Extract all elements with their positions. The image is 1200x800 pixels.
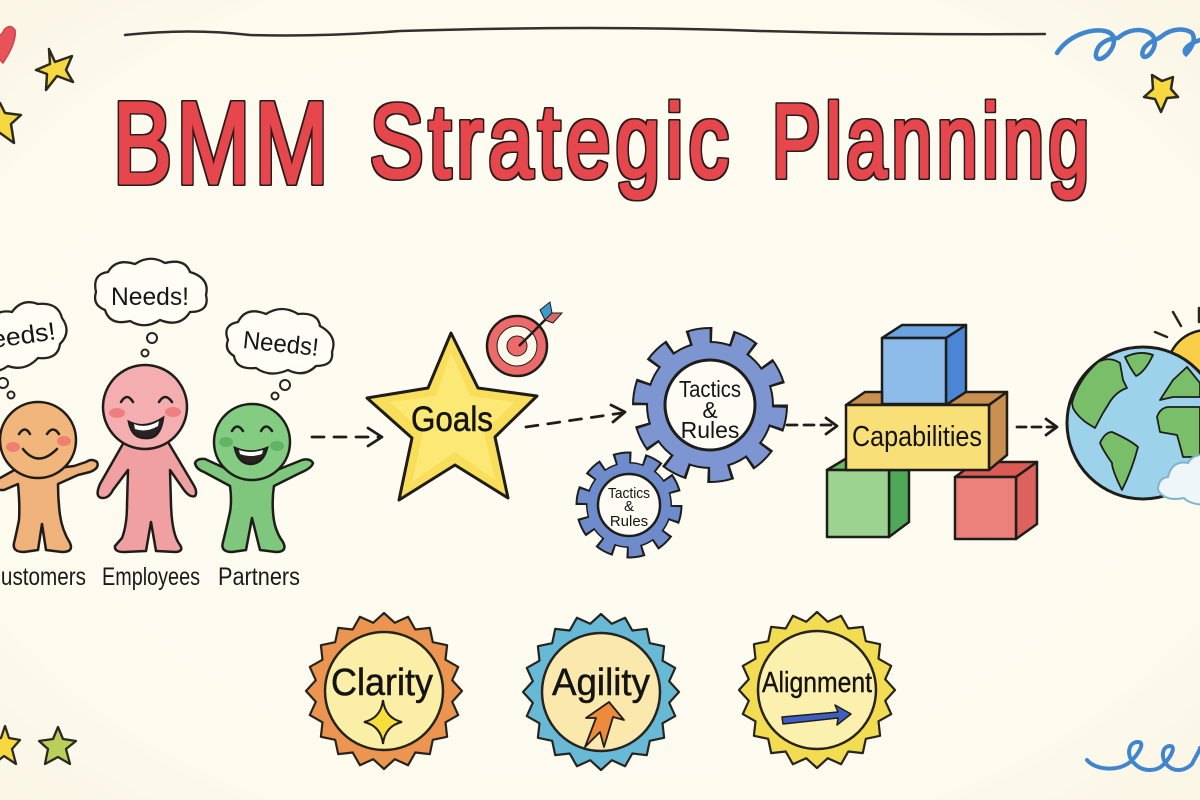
block: red <box>955 462 1037 539</box>
block: capabilities yellow <box>846 392 1007 470</box>
employee head <box>103 365 187 449</box>
icon: up arrow <box>585 702 624 747</box>
thought bubble: employee <box>95 259 207 356</box>
arrow: people to goals <box>312 428 382 446</box>
icon: red heart top left <box>0 26 15 63</box>
icon: target with arrow <box>487 302 562 376</box>
panel: stakeholders <box>0 259 334 591</box>
icon: star left edge <box>0 103 21 143</box>
block: blue <box>882 325 966 405</box>
block: green <box>827 458 909 537</box>
icon: star top right <box>1144 75 1178 112</box>
capabilities block stack <box>827 325 1037 539</box>
title <box>113 78 1094 208</box>
top decorative line <box>125 28 1045 36</box>
title: Strategic <box>370 84 734 200</box>
icon: star bottom left <box>39 727 76 764</box>
label: partners: Partners <box>218 563 300 591</box>
label: alignment: Alignment <box>762 667 872 699</box>
partner body <box>195 459 313 552</box>
arrow: tactics to capabilities <box>787 418 837 434</box>
thought bubble: partner <box>226 309 334 400</box>
label: tactics and rules small: Tactics <box>608 485 650 502</box>
label: tactics and rules: Tactics <box>679 376 741 402</box>
arrow: goals to tactics <box>526 405 625 427</box>
badge: clarity <box>306 613 462 769</box>
partner head <box>214 404 290 480</box>
badge: agility <box>523 614 679 770</box>
label: clarity: Clarity <box>331 662 433 704</box>
character: employee <box>98 365 200 591</box>
icon: blue squiggle top right <box>1057 30 1200 59</box>
label: employees: Employees <box>102 563 200 591</box>
customer face <box>6 430 71 458</box>
gear: tactics and rules large <box>642 337 778 473</box>
thought bubble: employee: Needs! <box>111 283 189 311</box>
customer head <box>0 402 76 478</box>
customer body <box>0 460 98 552</box>
gear: tactics and rules small <box>582 458 676 552</box>
partner face <box>219 426 284 464</box>
character: partner <box>195 404 313 591</box>
icon: cloud <box>1158 455 1200 505</box>
employee face <box>109 397 181 438</box>
icon: sparkle <box>364 700 402 744</box>
label: tactics and rules small: & <box>624 498 634 515</box>
arrow: capabilities to world <box>1017 419 1057 435</box>
employee body <box>98 442 196 552</box>
icon: right arrow <box>782 705 851 725</box>
label: tactics and rules: & <box>702 397 718 423</box>
badge: alignment <box>739 612 895 768</box>
label: capabilities: Capabilities <box>852 421 982 453</box>
label: tactics and rules: Rules <box>681 417 739 443</box>
icon: blue squiggle bottom right <box>1087 742 1200 770</box>
goals star <box>367 333 537 500</box>
thought bubble: partner: Needs! <box>242 326 320 362</box>
title: BMM <box>113 78 333 208</box>
label: tactics and rules small: Rules <box>610 513 648 530</box>
thought bubble: customer <box>0 302 67 398</box>
icon: star bottom left edge <box>0 726 20 764</box>
icon: globe <box>1067 347 1200 499</box>
character: customer <box>0 402 98 591</box>
icon: sun <box>1155 308 1200 410</box>
label: agility: Agility <box>552 662 650 704</box>
label: goals: Goals <box>411 400 493 439</box>
icon: star top left <box>36 49 73 90</box>
